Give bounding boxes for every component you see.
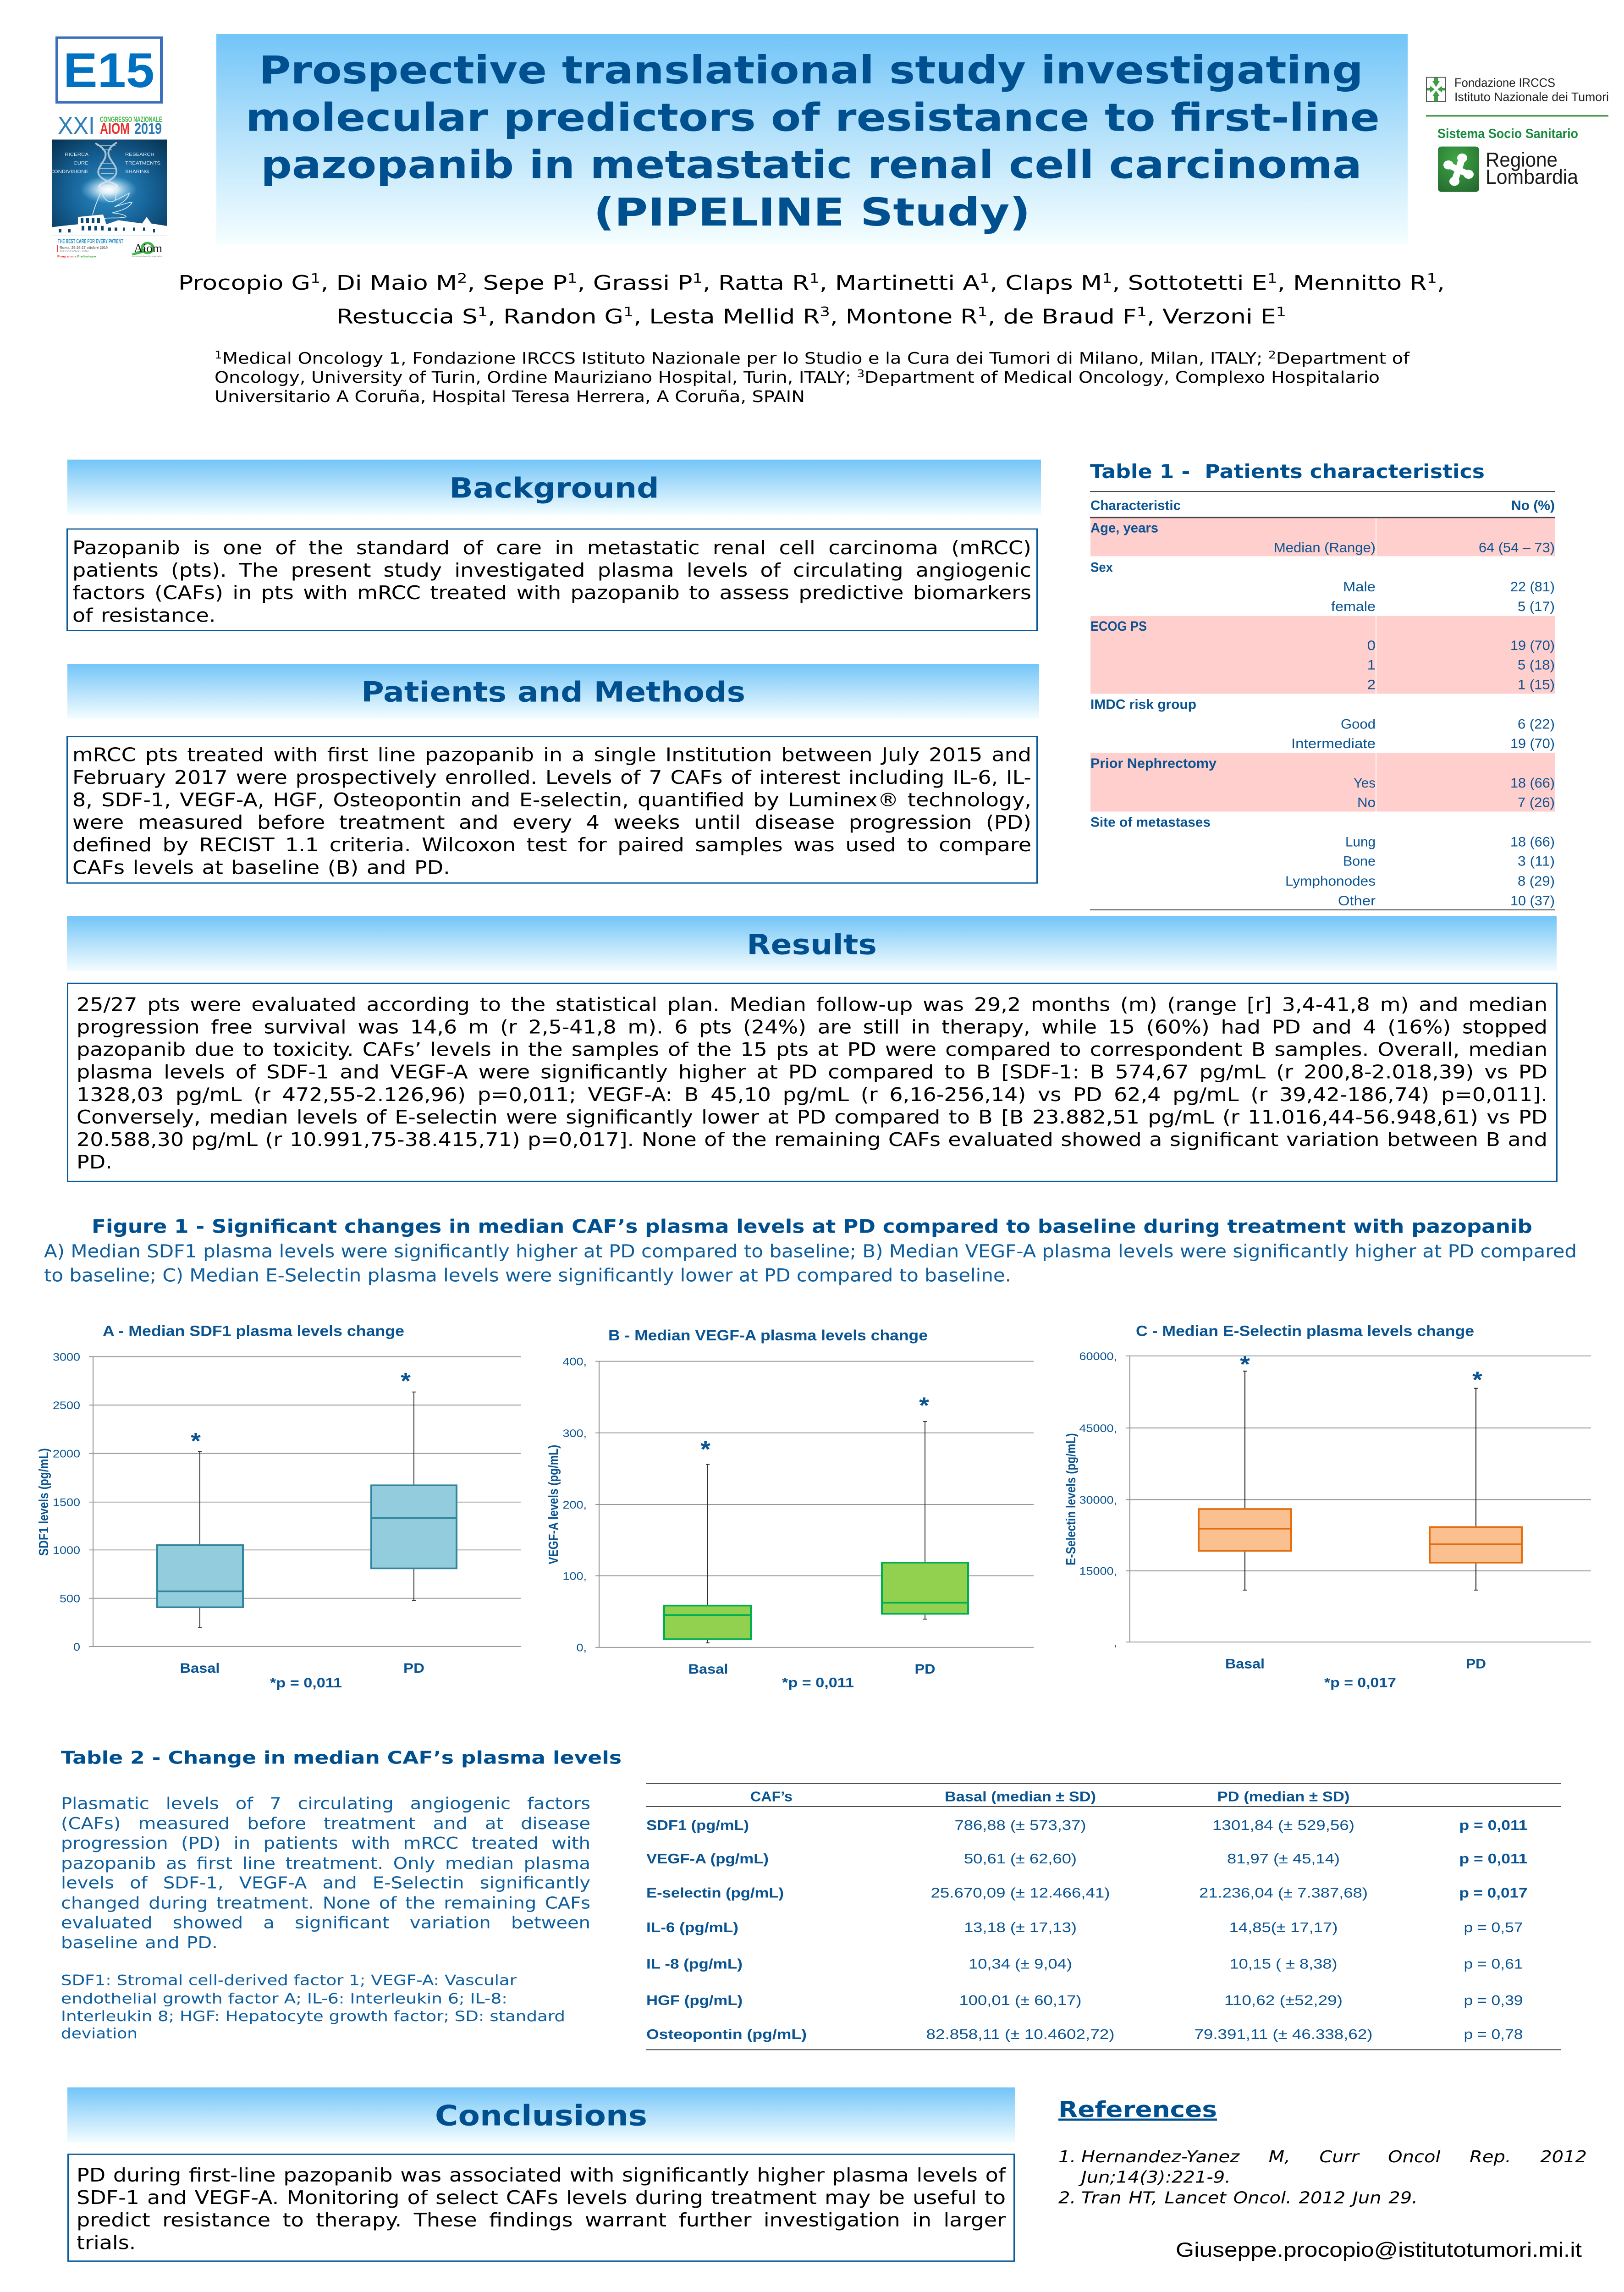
- table 2: change in median CAF levels: HGF (pg/mL): [646, 1993, 743, 2008]
- authors: Restuccia S: [336, 305, 466, 328]
- table 2: change in median CAF levels: Osteopontin (pg/mL): [646, 2027, 807, 2042]
- table 2: change in median CAF levels: 10,34 (± 9,04): [969, 1956, 1072, 1972]
- abbreviations note: [61, 1972, 565, 2042]
- authors: ,: [1437, 271, 1445, 295]
- logo: Fondazione IRCCS Istituto Nazionale dei Tumori: Istituto Nazionale dei Tumori: [1454, 90, 1609, 104]
- chart B: median VEGF-A box plot: [546, 1328, 1034, 1690]
- chart A: median SDF1 box plot: 1000: [53, 1544, 80, 1557]
- chart B: median VEGF-A box plot: B - Median VEGF-A plasma levels change: [608, 1328, 928, 1344]
- table 1: patients characteristics: Prior Nephrectomy: [1090, 756, 1217, 771]
- table 1: patients characteristics: Intermediate: [1291, 736, 1376, 751]
- heading band: Background: [67, 460, 1041, 515]
- chart C: median E-Selectin box plot: *: [1240, 1352, 1250, 1377]
- congress tagline and venue: Roma, 25-26-27 ottobre 2019: [60, 245, 108, 250]
- table 1: patients characteristics: 19 (70): [1510, 638, 1555, 653]
- authors: , Di Maio M: [320, 271, 457, 295]
- table 2 heading: Table 2 - Change in median CAF’s plasma levels: [61, 1747, 622, 1768]
- logo: Sistema Socio Sanitario Regione Lombardia: Sistema Socio Sanitario: [1437, 127, 1578, 141]
- chart A: median SDF1 box plot: [36, 1323, 521, 1691]
- affiliations: 1: [215, 348, 222, 361]
- table 2: change in median CAF levels: p = 0,017: [1459, 1885, 1528, 1901]
- table 1: patients characteristics: 19 (70): [1510, 736, 1555, 751]
- table 2: change in median CAF levels: IL-6 (pg/mL): [646, 1920, 738, 1935]
- reference list: [1058, 2147, 1587, 2208]
- table 2: change in median CAF levels: E-selectin (pg/mL): [646, 1885, 784, 1901]
- affiliations: Department of Medical Oncology, Complexo Hospitalario: [864, 368, 1380, 386]
- authors: , Montone R: [830, 305, 977, 328]
- title banner: Prospective translational study investigating: [259, 48, 1363, 93]
- badge: E15 poster code: E15: [63, 43, 154, 98]
- table 2: change in median CAF levels: p = 0,61: [1464, 1956, 1523, 1972]
- heading band: Patients and Methods: Patients and Methods: [361, 676, 745, 709]
- text block: table 2 description: baseline and PD.: [61, 1933, 218, 1952]
- table 2: change in median CAF levels: 81,97 (± 45,14): [1227, 1851, 1340, 1867]
- table 1: patients characteristics: 10 (37): [1510, 893, 1555, 909]
- panel: results text: progression free survival was 14,6 m (r 2,5-41,8 m). 6 pts (24%) are still in therapy, while 15 (60%) had PD and 4 (16%) stopped: [77, 1016, 1547, 1038]
- figure 1 caption: A) Median SDF1 plasma levels were significantly higher at PD compared to baseline; B) Median VEGF-A plasma levels were significantly higher at PD compared: [44, 1240, 1577, 1262]
- reference list: Jun;14(3):221-9.: [1081, 2168, 1231, 2187]
- authors: 1: [567, 271, 578, 286]
- panel: methods text: [66, 736, 1038, 884]
- reference list: 2.: [1058, 2188, 1076, 2207]
- table 2: change in median CAF levels: p = 0,011: [1459, 1818, 1528, 1833]
- authors: , Martinetti A: [820, 271, 980, 295]
- chart C: median E-Selectin box plot: 15000,: [1079, 1565, 1117, 1577]
- chart B: median VEGF-A box plot: PD: [915, 1662, 936, 1676]
- table 1: patients characteristics: 5 (17): [1518, 599, 1555, 614]
- panel: results text: 20.588,30 pg/mL (r 10.991,75-38.415,71) p=0,017]. None of the remaining CAFs evaluated showed a significant variation between B and: [77, 1129, 1547, 1151]
- affiliations: 3: [857, 368, 864, 380]
- title banner: molecular predictors of resistance to first-line: [246, 95, 1380, 140]
- heading band: Background: Background: [449, 472, 659, 505]
- chart B: median VEGF-A box plot: VEGF-A levels (pg/mL): [546, 1445, 561, 1564]
- authors: , Mennitto R: [1277, 271, 1427, 295]
- panel: results text: 25/27 pts were evaluated according to the statistical plan. Median follow-up was 29,2 months (m) (range [r] 3,4-41,8 m) and median: [77, 993, 1547, 1015]
- chart B: median VEGF-A box plot: 400,: [562, 1356, 587, 1368]
- chart A: median SDF1 box plot: *: [191, 1428, 201, 1454]
- figure 1 heading: Figure 1 - Significant changes in median CAF’s plasma levels at PD compared to baseline during treatment with pazopanib: [92, 1216, 1532, 1238]
- table 1: patients characteristics: Yes: [1354, 775, 1376, 790]
- logo: XXI Congresso Nazionale AIOM 2019: CONGRESSO NAZIONALE: [100, 115, 162, 124]
- text block: table 2 description: changed during treatment. None of the remaining CAFs: [61, 1894, 590, 1912]
- text block: table 2 description: evaluated showed a significant variation between: [61, 1913, 590, 1932]
- table 2: change in median CAF levels: p = 0,57: [1464, 1920, 1523, 1935]
- table 1: patients characteristics: Sex: [1090, 560, 1113, 575]
- table 1: patients characteristics: 1: [1367, 657, 1376, 672]
- chart A: median SDF1 box plot: A - Median SDF1 plasma levels change: [103, 1323, 404, 1339]
- logo: XXI Congresso Nazionale AIOM 2019: XXI: [58, 112, 95, 139]
- table 2: change in median CAF levels: 82.858,11 (± 10.4602,72): [926, 2027, 1114, 2042]
- title banner: (PIPELINE Study): [594, 190, 1030, 235]
- congress poster image: DNA, hand and Rome skyline: TREATMENTS: [125, 160, 160, 166]
- table 2: change in median CAF levels: 110,62 (±52,29): [1224, 1993, 1343, 2008]
- chart A: median SDF1 box plot: *p = 0,011: [270, 1675, 342, 1691]
- logo: AIOM: Associazione Italiana di Oncologia Medica: [132, 255, 162, 258]
- chart B: median VEGF-A box plot: 100,: [562, 1570, 587, 1582]
- authors: 1: [1276, 305, 1286, 320]
- table 1: patients characteristics: Good: [1341, 716, 1376, 732]
- authors: 1: [977, 305, 988, 320]
- authors: , de Braud F: [988, 305, 1137, 328]
- panel: methods text: 8, SDF-1, VEGF-A, HGF, Osteopontin and E-selectin, quantified by Luminex® technology,: [72, 789, 1031, 811]
- heading band: Patients and Methods: [67, 664, 1039, 719]
- chart C: median E-Selectin box plot: 45000,: [1079, 1422, 1117, 1435]
- chart C: median E-Selectin box plot: C - Median E-Selectin plasma levels change: [1136, 1323, 1474, 1339]
- table 2: change in median CAF levels: 14,85(± 17,17): [1229, 1920, 1338, 1935]
- chart C: median E-Selectin box plot: Basal: [1225, 1656, 1265, 1671]
- panel: conclusions text: [67, 2154, 1015, 2262]
- table 1: patients characteristics: Median (Range): [1274, 540, 1376, 555]
- table 1: patients characteristics: Table 1 - Patients characteristics: [1090, 460, 1485, 483]
- heading band: Results: Results: [747, 929, 877, 961]
- congress tagline and venue: Programma Preliminare: [57, 255, 96, 258]
- authors: 1: [693, 271, 703, 286]
- chart C: median E-Selectin box plot: 60000,: [1079, 1350, 1117, 1363]
- text block: table 2 description: Plasmatic levels of 7 circulating angiogenic factors: [61, 1794, 590, 1813]
- table 2: change in median CAF levels: SDF1 (pg/mL): [646, 1818, 749, 1833]
- abbreviations note: deviation: [61, 2025, 138, 2042]
- panel: results text: plasma levels of SDF-1 and VEGF-A were significantly higher at PD compared to B [SDF-1: B 574,67 pg/mL (r 200,8-2.018,39) vs PD: [77, 1061, 1547, 1083]
- panel: background text: of resistance.: [72, 604, 215, 626]
- chart A: median SDF1 box plot: PD: [403, 1661, 424, 1676]
- panel: methods text: defined by RECIST 1.1 criteria. Wilcoxon test for paired samples was used to compare: [72, 834, 1031, 856]
- authors: , Ratta R: [703, 271, 809, 295]
- logo: Sistema Socio Sanitario Regione Lombardia: Regione: [1486, 149, 1558, 171]
- table 1: patients characteristics: 18 (66): [1510, 775, 1555, 790]
- panel: results text: pazopanib due to toxicity. CAFs’ levels in the samples of the 15 pts at PD were compared to correspondent B samples. Overall, median: [77, 1038, 1547, 1060]
- table 2: change in median CAF levels: 25.670,09 (± 12.466,41): [930, 1885, 1110, 1901]
- panel: background text: patients (pts). The present study investigated plasma levels of circulating angiogenic: [72, 559, 1031, 581]
- table 2: change in median CAF levels: VEGF-A (pg/mL): [646, 1851, 769, 1867]
- table 1: patients characteristics: 6 (22): [1518, 716, 1555, 732]
- table 2: change in median CAF levels: 21.236,04 (± 7.387,68): [1199, 1885, 1368, 1901]
- figure 1 caption: [44, 1240, 1577, 1286]
- chart C: median E-Selectin box plot: 30000,: [1079, 1494, 1117, 1506]
- logo: Fondazione IRCCS Istituto Nazionale dei Tumori: [1426, 76, 1609, 116]
- reference list: Tran HT, Lancet Oncol. 2012 Jun 29.: [1081, 2188, 1418, 2207]
- congress poster image: DNA, hand and Rome skyline: RESEARCH: [125, 152, 154, 157]
- chart C: median E-Selectin box plot: ,: [1114, 1636, 1117, 1649]
- heading band: Conclusions: Conclusions: [435, 2099, 647, 2132]
- chart A: median SDF1 box plot: 2000: [53, 1448, 80, 1460]
- table 1: patients characteristics: ECOG PS: [1090, 619, 1147, 634]
- logo: Sistema Socio Sanitario Regione Lombardia: [1437, 127, 1579, 192]
- panel: conclusions text: PD during first-line pazopanib was associated with significantly higher plasma levels of: [77, 2164, 1006, 2186]
- chart C: median E-Selectin box plot: *p = 0,017: [1324, 1675, 1396, 1690]
- chart B: median VEGF-A box plot: *p = 0,011: [782, 1675, 854, 1690]
- panel: methods text: mRCC pts treated with first line pazopanib in a single Institution between July 2015 and: [72, 744, 1031, 766]
- chart A: median SDF1 box plot: 1500: [53, 1497, 80, 1509]
- panel: background text: factors (CAFs) in pts with mRCC treated with pazopanib to assess predictive biomarkers: [72, 582, 1031, 604]
- authors: 1: [1267, 271, 1277, 286]
- chart A: median SDF1 box plot: 3000: [53, 1351, 80, 1363]
- table 2: change in median CAF levels: [646, 1783, 1561, 2050]
- authors: 1: [1137, 305, 1147, 320]
- congress tagline and venue: [57, 238, 123, 258]
- authors: 3: [820, 305, 830, 320]
- panel: results text: PD.: [77, 1151, 112, 1173]
- chart B: median VEGF-A box plot: *: [919, 1393, 929, 1418]
- chart C: median E-Selectin box plot: *: [1472, 1367, 1482, 1393]
- reference list: Hernandez-Yanez M, Curr Oncol Rep. 2012: [1081, 2148, 1587, 2166]
- affiliations: Department of: [1276, 349, 1410, 368]
- chart B: median VEGF-A box plot: Basal: [688, 1662, 728, 1676]
- abbreviations note: endothelial growth factor A; IL-6: Interleukin 6; IL-8:: [61, 1990, 507, 2007]
- logo: Fondazione IRCCS Istituto Nazionale dei Tumori: Fondazione IRCCS: [1454, 76, 1555, 90]
- chart C: median E-Selectin box plot: PD: [1466, 1656, 1486, 1671]
- congress poster image: DNA, hand and Rome skyline: SHARING: [125, 169, 149, 175]
- table 1: patients characteristics: 2: [1367, 677, 1376, 692]
- authors: , Sepe P: [467, 271, 567, 295]
- table 1: patients characteristics: [1090, 460, 1555, 910]
- panel: conclusions text: SDF-1 and VEGF-A. Monitoring of select CAFs levels during treatment may be useful to: [77, 2187, 1006, 2209]
- heading band: Results: [67, 916, 1557, 971]
- authors: , Sottotetti E: [1112, 271, 1267, 295]
- authors: 1: [623, 305, 633, 320]
- table 1: patients characteristics: Bone: [1343, 854, 1376, 869]
- panel: methods text: were measured before treatment and every 4 weeks until disease progression (PD): [72, 811, 1031, 833]
- congress poster image: DNA, hand and Rome skyline: CONDIVISIONE: [50, 169, 88, 175]
- affiliations: Oncology, University of Turin, Ordine Mauriziano Hospital, Turin, ITALY;: [215, 368, 842, 386]
- panel: methods text: CAFs levels at baseline (B) and PD.: [72, 856, 450, 878]
- table 2: change in median CAF levels: 100,01 (± 60,17): [959, 1993, 1081, 2008]
- table 1: patients characteristics: 7 (26): [1518, 795, 1555, 810]
- panel: conclusions text: predict resistance to therapy. These findings warrant further investigation in larger: [77, 2209, 1006, 2231]
- contact email: Giuseppe.procopio@istitutotumori.mi.it: [1176, 2239, 1582, 2262]
- chart C: median E-Selectin box plot: [1063, 1323, 1591, 1690]
- chart A: median SDF1 box plot: 0: [73, 1641, 80, 1653]
- chart B: median VEGF-A box plot: 0,: [576, 1642, 587, 1654]
- figure 1 caption: to baseline; C) Median E-Selectin plasma levels were significantly lower at PD compared to baseline.: [44, 1265, 1011, 1286]
- table 2: change in median CAF levels: 79.391,11 (± 46.338,62): [1195, 2027, 1373, 2042]
- table 2: change in median CAF levels: 10,15 ( ± 8,38): [1229, 1956, 1337, 1972]
- affiliations: Universitario A Coruña, Hospital Teresa Herrera, A Coruña, SPAIN: [215, 387, 805, 406]
- table 1: patients characteristics: No (%): [1511, 498, 1555, 513]
- text block: table 2 description: progression (PD) in patients with mRCC treated with: [61, 1834, 590, 1853]
- table 1: patients characteristics: 1 (15): [1518, 677, 1555, 692]
- table 1: patients characteristics: 5 (18): [1518, 657, 1555, 672]
- table 2: change in median CAF levels: Basal (median ± SD): [945, 1789, 1096, 1804]
- text block: table 2 description: [61, 1794, 590, 1953]
- table 1: patients characteristics: Other: [1338, 893, 1376, 909]
- chart A: median SDF1 box plot: 500: [60, 1593, 80, 1605]
- table 2: change in median CAF levels: 50,61 (± 62,60): [964, 1851, 1077, 1867]
- table 1: patients characteristics: 18 (66): [1510, 834, 1555, 849]
- title banner: [216, 34, 1408, 244]
- table 1: patients characteristics: 22 (81): [1510, 579, 1555, 595]
- panel: conclusions text: trials.: [77, 2231, 136, 2253]
- table 1: patients characteristics: Characteristic: [1090, 498, 1181, 513]
- table 1: patients characteristics: 3 (11): [1518, 854, 1555, 869]
- table 1: patients characteristics: Male: [1343, 579, 1376, 595]
- heading band: Conclusions: [67, 2088, 1015, 2143]
- logo: XXI Congresso Nazionale AIOM 2019: AIOM: [100, 120, 130, 137]
- table 1: patients characteristics: IMDC risk group: [1090, 697, 1196, 712]
- affiliations: Medical Oncology 1, Fondazione IRCCS Istituto Nazionale per lo Studio e la Cura dei Tumori di Milano, Milan, ITALY;: [222, 349, 1268, 368]
- table 1: patients characteristics: 8 (29): [1518, 874, 1555, 889]
- abbreviations note: Interleukin 8; HGF: Hepatocyte growth factor; SD: standard: [61, 2008, 565, 2024]
- table 1: patients characteristics: Lung: [1345, 834, 1376, 849]
- table 1: patients characteristics: No: [1357, 795, 1376, 810]
- chart A: median SDF1 box plot: *: [401, 1368, 411, 1394]
- table 1: patients characteristics: 64 (54 – 73): [1479, 540, 1555, 555]
- table 2: change in median CAF levels: 786,88 (± 573,37): [954, 1818, 1086, 1833]
- authors: [178, 271, 1445, 328]
- panel: background text: Pazopanib is one of the standard of care in metastatic renal cell carcinoma (mRCC): [72, 537, 1031, 559]
- table 2: change in median CAF levels: 13,18 (± 17,13): [964, 1920, 1077, 1935]
- reference list: 1.: [1058, 2148, 1076, 2166]
- table 2: change in median CAF levels: p = 0,39: [1464, 1993, 1523, 2008]
- chart A: median SDF1 box plot: Basal: [180, 1661, 220, 1676]
- table 2: change in median CAF levels: IL -8 (pg/mL): [646, 1956, 743, 1972]
- panel: results text: [67, 983, 1558, 1182]
- authors: , Lesta Mellid R: [633, 305, 820, 328]
- congress poster image: DNA, hand and Rome skyline: RICERCA: [65, 152, 89, 157]
- authors: 1: [478, 305, 488, 320]
- chart A: median SDF1 box plot: SDF1 levels (pg/mL): [36, 1448, 51, 1556]
- chart A: median SDF1 box plot: 2500: [53, 1399, 80, 1412]
- authors: 1: [809, 271, 820, 286]
- logo: AIOM: Aiom: [134, 242, 162, 255]
- panel: results text: Conversely, median levels of E-selectin were significantly lower at PD compared to B [B 23.882,51 pg/mL (r 11.016,44-56.948,61) vs PD: [77, 1106, 1547, 1128]
- table 2: change in median CAF levels: CAF’s: [750, 1789, 793, 1804]
- affiliations: 2: [1268, 348, 1276, 361]
- table 1: patients characteristics: Age, years: [1090, 520, 1158, 535]
- table 2: change in median CAF levels: p = 0,011: [1459, 1851, 1528, 1867]
- table 2: change in median CAF levels: 1301,84 (± 529,56): [1212, 1818, 1354, 1833]
- authors: 1: [1102, 271, 1112, 286]
- text block: table 2 description: pazopanib as first line treatment. Only median plasma: [61, 1854, 590, 1873]
- authors: , Grassi P: [578, 271, 693, 295]
- chart B: median VEGF-A box plot: *: [700, 1437, 710, 1462]
- logo: XXI Congresso Nazionale AIOM 2019: [58, 112, 162, 139]
- affiliations: [215, 348, 1410, 406]
- table 1: patients characteristics: Site of metastases: [1090, 815, 1211, 830]
- table 1: patients characteristics: 0: [1367, 638, 1376, 653]
- table 2: change in median CAF levels: PD (median ± SD): [1217, 1789, 1350, 1804]
- authors: Procopio G: [178, 271, 299, 295]
- chart C: median E-Selectin box plot: E-Selectin levels (pg/mL): [1063, 1433, 1078, 1565]
- table 2: change in median CAF levels: p = 0,78: [1464, 2027, 1523, 2042]
- congress poster image: DNA, hand and Rome skyline: CURE: [73, 160, 88, 166]
- authors: , Claps M: [990, 271, 1102, 295]
- authors: 1: [980, 271, 990, 286]
- abbreviations note: SDF1: Stromal cell-derived factor 1; VEGF-A: Vascular: [61, 1972, 517, 1989]
- authors: 1: [310, 271, 320, 286]
- authors: 2: [457, 271, 467, 286]
- text block: table 2 description: (CAFs) measured before treatment and at disease: [61, 1814, 590, 1833]
- chart B: median VEGF-A box plot: 300,: [562, 1427, 587, 1439]
- references heading: References: [1058, 2097, 1217, 2123]
- congress poster image: DNA, hand and Rome skyline: [50, 139, 167, 235]
- panel: results text: 1328,03 pg/mL (r 472,55-2.126,96) p=0,011; VEGF-A: B 45,10 pg/mL (r 6,16-256,14) vs PD 62,4 pg/mL (r 39,42-186,74) p=0,011].: [77, 1083, 1547, 1106]
- authors: , Verzoni E: [1147, 305, 1276, 328]
- panel: methods text: February 2017 were prospectively enrolled. Levels of 7 CAFs of interest including IL-6, IL-: [72, 766, 1031, 788]
- logo: XXI Congresso Nazionale AIOM 2019: 2019: [134, 120, 162, 137]
- authors: 1: [1427, 271, 1437, 286]
- congress tagline and venue: THE BEST CARE FOR EVERY PATIENT: [58, 238, 123, 244]
- title banner: pazopanib in metastatic renal cell carcinoma: [261, 143, 1362, 187]
- congress tagline and venue: Marriott Park Hotel: [60, 250, 89, 253]
- text block: table 2 description: levels of SDF-1, VEGF-A and E-Selectin significantly: [61, 1874, 590, 1893]
- panel: background text: [66, 529, 1038, 631]
- table 1: patients characteristics: female: [1331, 599, 1376, 614]
- logo: Sistema Socio Sanitario Regione Lombardia: Lombardia: [1486, 165, 1579, 188]
- table 1: patients characteristics: Lymphonodes: [1285, 874, 1376, 889]
- chart B: median VEGF-A box plot: 200,: [562, 1499, 587, 1511]
- authors: , Randon G: [488, 305, 623, 328]
